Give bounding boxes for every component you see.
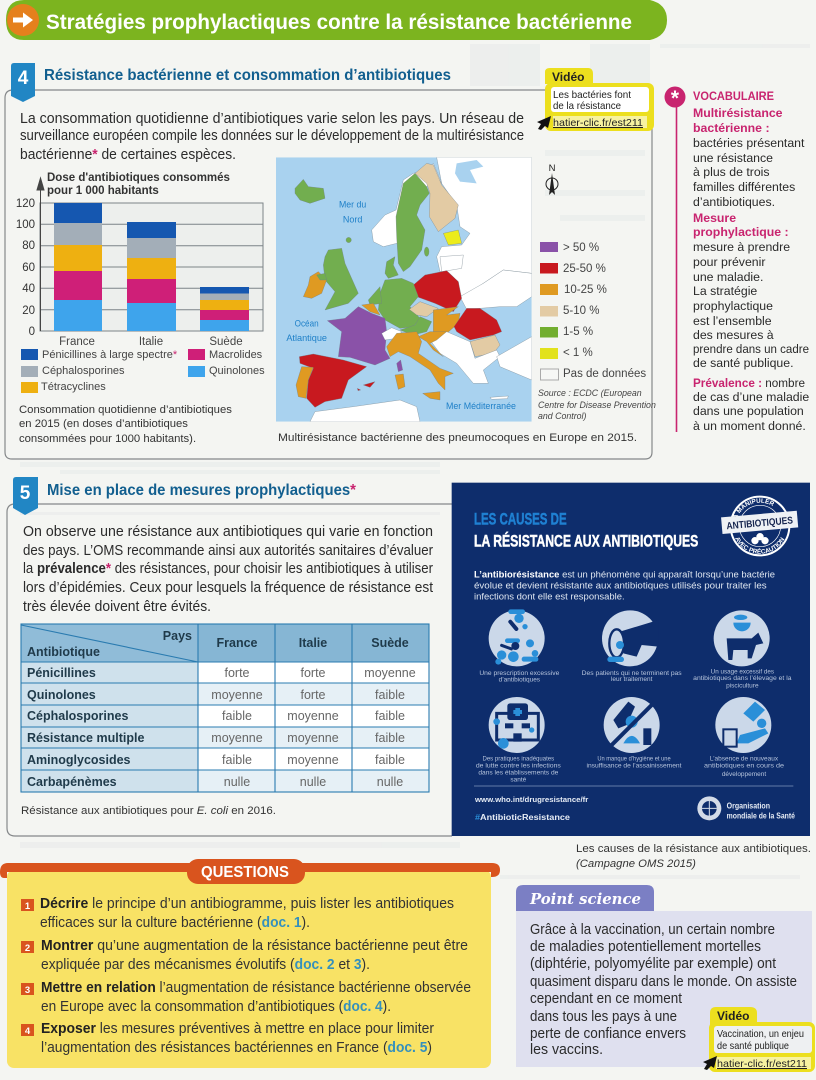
icon captions: de lutte contre les infections [476,762,562,769]
vocabulary sidebar [664,86,809,433]
icon: cow and fish [714,610,770,666]
chart legend: Pénicillines à large spectre* [42,349,178,361]
y axis labels: 120 [16,198,35,210]
map legend: 25-50 % [563,263,606,275]
resistance table: Résistance multiple [27,731,144,745]
video callout 2: Vidéo [717,1009,749,1023]
resistance table: nulle [300,775,326,789]
panel: document 5 [7,477,452,836]
resistance table: moyenne [287,731,339,745]
resistance table: nulle [224,775,250,789]
WHO logo: mondiale de la Santé [727,810,795,820]
map legend: 10-25 % [564,284,607,296]
resistance table: moyenne [364,666,416,680]
icon captions: Une prescription excessive [479,670,560,677]
poster intro text: évolue et devient résistante aux antibiotiques utilisés pour traiter les [474,580,767,590]
map legend: < 1 % [563,347,593,359]
title: Stratégies prophylactiques contre la résistance bactérienne [46,11,632,34]
vocabulary text: Prévalence : nombre [693,376,805,390]
document number 5: 5 [20,483,31,504]
chart caption: Consommation quotidienne d’antibiotiques [19,404,232,416]
stamp: ANTIBIOTIQUES [726,515,794,532]
icon captions: Un manque d’hygiène et une [597,755,671,762]
y axis arrow [37,178,44,331]
panel: questions [0,859,500,1068]
vocabulary text: familles différentes [693,180,795,194]
question 3 [21,980,471,1015]
vocabulary text: une résistance [693,151,773,165]
sea labels: Mer Méditerranée [446,401,516,411]
map legend: Pas de données [563,368,646,380]
y axis labels: 80 [22,240,35,252]
vocabulary text: VOCABULAIRE [693,89,774,103]
point science text: dans tous les pays à une [530,1009,677,1025]
video callout 1 [537,68,654,131]
poster caption: Les causes de la résistance aux antibiotiques. [576,843,811,855]
bars: France [54,203,102,331]
question 2: 2 [25,943,30,954]
point science text: perte de confiance envers [530,1026,686,1042]
poster intro text: L’antibiorésistance est un phénomène qui apparaît lorsqu’une bactérie [474,569,775,579]
vocabulary text: prophylactique [693,299,773,313]
resistance table: nulle [377,775,403,789]
resistance table: faible [375,709,405,723]
poster url and hashtag: www.who.int/drugresistance/fr [474,795,588,804]
video callout 1: Les bactéries font [553,90,631,101]
heading document 4: Résistance bactérienne et consommation d’antibiotiques [44,67,451,84]
icon captions: leur traitement [611,676,653,683]
resistance table: faible [375,688,405,702]
document number 4 [11,63,35,102]
intro text: bactérienne* de certaines espèces. [20,147,236,163]
icon captions: développement [722,771,766,778]
chart axis title: pour 1 000 habitants [47,185,159,197]
vocabulary text: La stratégie [693,284,757,298]
panel: document 4 [5,63,656,459]
vocabulary text: à plus de trois [693,165,770,179]
sea labels: Mer du [339,199,366,209]
video callout 2: Vaccination, un enjeu [717,1029,804,1040]
poster url and hashtag [474,795,588,822]
map of Europe [276,157,532,422]
chart legend: Macrolides [209,349,263,361]
stamp [721,496,798,556]
chart grid and axis [40,203,263,331]
question 1: 1 [25,901,31,912]
resistance table [21,624,429,792]
icon captions: d’antibiotiques [499,677,541,684]
intro text: surveillance européen compile les données sur le développement de la multirésistance [20,128,524,144]
resistance table: forte [300,688,326,702]
icon captions: Un usage excessif des [711,669,775,676]
x axis labels [59,336,243,348]
poster title [474,510,698,551]
resistance table: Pays [163,629,192,643]
icon: pill bottle [602,610,658,666]
poster caption source: (Campagne OMS 2015) [576,858,696,870]
point science tab: Point science [529,891,641,908]
question 3: en Europe avec la consommation d’antibiotiques (doc. 4). [41,999,391,1015]
question 2: expliquée par des mécanismes évolutifs (doc. 2 et 3). [41,957,370,973]
sea labels: Océan [295,318,319,328]
video callout 2: de santé publique [717,1041,789,1052]
intro text: très élevée doivent être évités. [23,599,211,615]
intro text: lors d’épidémies. Ceux pour lesquels la fréquence de résistance est [23,580,433,596]
poster intro text [474,569,775,601]
icon: cursor arrow [703,1056,717,1070]
questions header band [0,859,500,884]
questions header band: QUESTIONS [201,864,289,881]
x axis labels: Italie [139,336,163,348]
x axis labels: France [59,336,95,348]
vocabulary text: Multirésistance [693,106,783,120]
map legend: Source : ECDC (European [538,388,642,398]
sea labels [286,199,516,411]
intro text [20,111,524,163]
WHO logo [697,796,795,820]
header banner [6,0,667,40]
intro text [23,524,433,615]
resistance table: faible [375,731,405,745]
map legend: > 50 % [563,242,599,254]
resistance table: France [216,636,258,650]
y axis labels: 40 [22,283,35,295]
vocabulary text: bactéries présentant [693,136,805,150]
icon captions: antibiotiques dans l’élevage et la [693,675,792,682]
point science text [530,922,797,1058]
stamp: À MANIPULER [733,498,774,516]
map legend: Centre for Disease Prevention [538,400,656,410]
question 4: 4 [25,1026,31,1037]
chart legend [21,349,265,393]
document number 4: 4 [18,68,29,89]
point science text: quasiment disparu dans le monde. On assiste [530,974,797,990]
resistance table: faible [222,709,252,723]
stamp: AVEC PRÉCAUTION [735,537,784,554]
question 1 [21,896,454,931]
sea labels: Nord [343,215,362,225]
icon captions: Des patients qui ne terminent pas [582,670,682,677]
icon captions: dans les établissements de [478,769,559,776]
resistance table: Suède [371,636,409,650]
chart legend: Céphalosporines [42,365,125,377]
icon captions: antibiotiques en cours de [704,762,784,769]
icon: prescription pills [489,609,545,666]
chart caption: en 2015 (en doses d’antibiotiques [19,418,188,430]
icon: hygiene crossed out [604,697,660,753]
question 2 [21,938,468,973]
point science text: cependant en ce moment [530,991,682,1007]
map legend [538,242,656,421]
vocabulary text: de cas d’une maladie [693,390,809,404]
sea labels: Atlantique [286,333,327,343]
resistance table: Aminoglycosides [27,753,131,767]
document number 5 [13,477,38,515]
resistance table: moyenne [211,688,263,702]
video callout 1: Vidéo [552,70,584,84]
map legend: 5-10 % [563,305,599,317]
intro text: la prévalence* des résistances, pour choisir les antibiotiques à utiliser [23,561,433,577]
question 1: efficaces sur la culture bactérienne (doc. 1). [40,915,310,931]
bars: Suède [200,287,249,331]
icon: cursor arrow [537,116,551,130]
resistance table: Céphalosporines [27,709,128,723]
y axis labels: 20 [22,305,35,317]
question 3: 3 [25,985,30,996]
map legend: 1-5 % [563,326,593,338]
point science text: de maladies potentiellement mortelles [530,939,761,955]
vocabulary text: des mesures à [693,328,774,342]
icon captions [476,669,792,783]
resistance table: Antibiotique [27,645,100,659]
icon: north compass [546,163,558,195]
intro text: des pays. L’OMS recommande ainsi aux autorités sanitaires d’évaluer [23,543,433,559]
poster url and hashtag: #AntibioticResistance [475,813,571,822]
resistance table: Italie [299,636,327,650]
resistance table: moyenne [211,731,263,745]
question 4: l’augmentation des résistances bactériennes en France (doc. 5) [41,1040,432,1056]
WHO logo: Organisation [727,800,770,810]
video callout 1: de la résistance [553,101,621,112]
video callout 2 [703,1007,815,1072]
icon: vocabulary asterisk: * [671,87,680,110]
icon captions: L’absence de nouveaux [710,755,779,762]
map legend: and Control) [538,411,586,421]
vocabulary text: une maladie. [693,270,763,284]
y axis labels [16,198,35,338]
heading document 5: Mise en place de mesures prophylactiques* [47,482,357,499]
bar chart: antibiotic doses [16,172,265,393]
panel: point science [516,885,812,1067]
vocabulary text: de santé publique. [693,356,794,370]
resistance table: Pénicillines [27,666,96,680]
resistance table: moyenne [287,753,339,767]
resistance table: Carbapénèmes [27,775,117,789]
resistance table: forte [224,666,250,680]
vocabulary text: est l’ensemble [693,314,772,328]
vocabulary text: Mesure [693,211,736,225]
resistance table: faible [375,753,405,767]
icon: orange arrow [7,4,39,36]
bars: Italie [127,222,176,331]
vocabulary text: d’antibiotiques. [693,195,775,209]
point science text: Grâce à la vaccination, un certain nombre [530,922,775,938]
question 1: Décrire le principe d’un antibiogramme, puis lister les antibiotiques [40,896,454,912]
question 2: Montrer qu’une augmentation de la résistance bactérienne peut être [41,938,468,954]
intro text: La consommation quotidienne d’antibiotiques varie selon les pays. Un réseau de [20,111,524,127]
poster intro text: infections dont elle est responsable. [474,591,625,601]
icon captions: santé [510,776,527,783]
map caption: Multirésistance bactérienne des pneumocoques en Europe en 2015. [278,432,637,444]
video callout 2: hatier-clic.fr/est211 [717,1058,807,1070]
chart caption: consommées pour 1000 habitants). [19,433,196,445]
chart legend: Quinolones [209,365,265,377]
y axis labels: 0 [29,326,35,338]
point science tab [516,885,654,911]
point science text: (diphtérie, polyomyélite par exemple) ont [530,956,776,972]
icon: vocabulary asterisk [664,86,686,432]
chart axis title: Dose d'antibiotiques consommés [47,172,230,184]
icon captions: Des pratiques inadéquates [482,755,555,762]
question 4: Exposer les mesures préventives à mettre en place pour limiter [41,1021,434,1037]
icon: north compass: N [549,163,556,174]
point science text: les vaccins. [530,1042,603,1058]
icon captions: insuffisance de l’assainissement [586,762,682,769]
vocabulary text [693,89,809,433]
video callout 1: hatier-clic.fr/est211 [553,117,643,129]
resistance table: moyenne [287,709,339,723]
vocabulary text: prophylactique : [693,225,789,239]
question 4 [21,1021,434,1056]
vocabulary text: dans une population [693,404,804,418]
y axis labels: 100 [16,219,35,231]
vocabulary text: mesure à prendre [693,240,790,254]
resistance table: forte [300,666,326,680]
resistance table: faible [222,753,252,767]
chart legend: Tétracyclines [41,381,106,393]
icon: microscope [715,697,771,753]
vocabulary text: prendre dans un cadre [693,342,809,356]
icon: hospital [489,697,545,753]
question 3: Mettre en relation l’augmentation de résistance bactérienne observée [41,980,471,996]
x axis labels: Suède [209,336,243,348]
table caption: Résistance aux antibiotiques pour E. coli en 2016. [21,805,276,817]
poster title: LES CAUSES DE [474,510,567,529]
vocabulary text: bactérienne : [693,121,770,135]
vocabulary text: à un moment donné. [693,419,806,433]
icon captions: pisciculture [726,682,759,689]
resistance table: Quinolones [27,688,96,702]
vocabulary text: pour prévenir [693,255,765,269]
intro text: On observe une résistance aux antibiotiques qui varie en fonction [23,524,433,540]
WHO poster [452,482,810,836]
y axis labels: 60 [22,262,35,274]
poster title: LA RÉSISTANCE AUX ANTIBIOTIQUES [474,532,698,551]
